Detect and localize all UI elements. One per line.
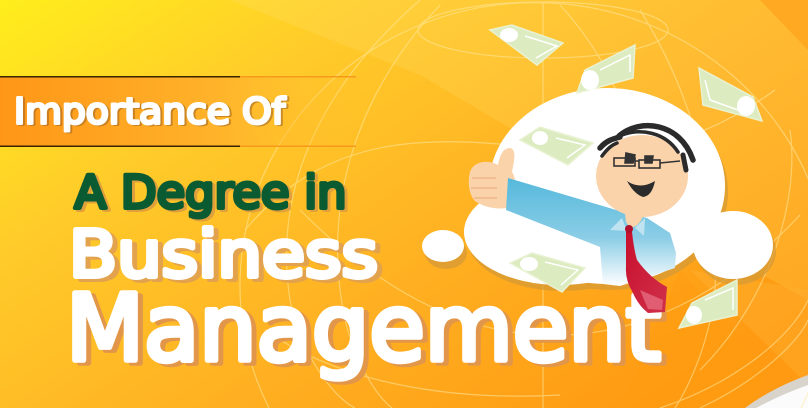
shirt and arm bbox=[506, 178, 676, 286]
collar bbox=[610, 218, 645, 236]
bill 1 bbox=[490, 25, 563, 65]
banner bbox=[0, 76, 356, 147]
bill 2 bbox=[577, 45, 635, 93]
cartoon businessman bbox=[469, 126, 693, 313]
glasses bbox=[614, 153, 680, 168]
bill 5 bbox=[510, 253, 585, 292]
globe line pattern bbox=[240, 0, 808, 408]
bill 3 bbox=[699, 68, 762, 121]
heading: Management: Management bbox=[66, 275, 661, 382]
money bills bbox=[490, 25, 762, 328]
heading: Business: Business bbox=[74, 222, 383, 296]
thought cloud bbox=[422, 88, 776, 291]
bill 4 bbox=[520, 127, 593, 165]
hand thumbs up bbox=[469, 148, 515, 209]
bill 6 bbox=[679, 280, 737, 328]
banner text: Importance Of: Importance Of bbox=[16, 92, 288, 134]
banner text: Importance Of: Importance Of bbox=[14, 92, 286, 132]
head bbox=[596, 135, 688, 217]
neck bbox=[624, 205, 650, 227]
heading: A Degree in: A Degree in bbox=[74, 166, 346, 219]
heading: Business: Business bbox=[69, 218, 378, 292]
hair bbox=[600, 126, 693, 170]
mouth bbox=[627, 181, 655, 197]
necktie bbox=[625, 225, 667, 313]
heading: A Degree in: A Degree in bbox=[78, 168, 350, 221]
heading: Management: Management bbox=[71, 278, 666, 385]
